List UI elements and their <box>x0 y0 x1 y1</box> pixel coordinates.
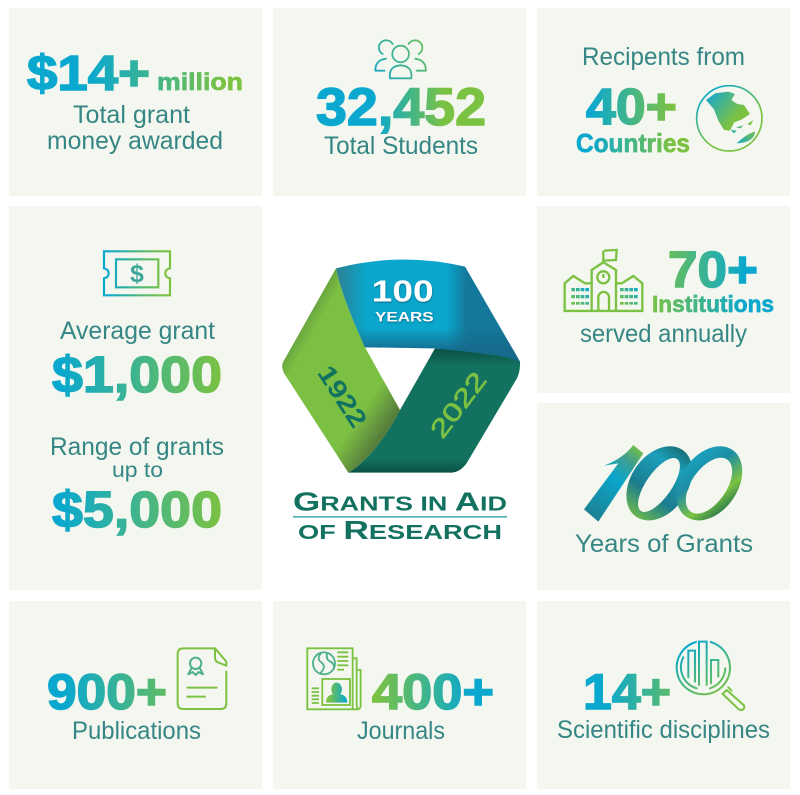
text: 2022: 2022 <box>425 367 493 444</box>
stat: 70+ institutions <box>652 241 774 317</box>
logo mark: ribbon <box>282 260 520 473</box>
icon: school building <box>565 250 642 311</box>
text: 100 years: YEARS <box>375 308 434 324</box>
stat: $14+ million: million <box>157 69 243 96</box>
panel: average grant <box>9 206 262 590</box>
stat: 14+: 14+ <box>583 664 671 720</box>
stat: $14+ million: $14+ <box>27 47 150 101</box>
label: total grant money awarded: Total grant <box>73 101 190 129</box>
text: 1922: 1922 <box>312 361 372 433</box>
stat: 70+ institutions: 70+ <box>668 241 758 298</box>
stat: 40+ countries: 40+ <box>586 78 677 135</box>
icon: certificate document <box>178 648 226 709</box>
wordmark: grants in aid of research: OF RESEARCH <box>298 515 502 545</box>
icon: newspaper <box>307 648 361 709</box>
panel: countries <box>537 8 790 196</box>
text: 100 years <box>372 274 434 324</box>
label: range of grants up to: Range of grants <box>50 433 224 461</box>
panel: years of grants <box>537 403 790 590</box>
panel: total students <box>273 8 526 196</box>
stat: 40+ countries <box>576 78 690 158</box>
wordmark: grants in aid of research <box>293 487 507 545</box>
label: journals: Journals <box>357 717 445 745</box>
label: total students: Total Students <box>324 132 478 160</box>
stat: 400+: 400+ <box>372 664 494 720</box>
icon: people <box>375 40 426 78</box>
stat: 70+ institutions: Institutions <box>652 291 774 317</box>
icon: magnifier with bars <box>677 642 744 710</box>
panel: institutions <box>537 206 790 393</box>
panel: scientific disciplines <box>537 601 790 789</box>
label: years of grants: Years of Grants <box>575 530 753 558</box>
logo: grants in aid of research <box>282 260 520 545</box>
wordmark: grants in aid of research: GRANTS IN AID <box>293 487 507 517</box>
label: recipents from: Recipents from <box>582 43 745 71</box>
icon: money ticket <box>104 251 170 295</box>
stat: $14+ million <box>27 47 243 101</box>
stat: $5,000: $5,000 <box>52 481 222 538</box>
icon: globe <box>697 86 762 151</box>
stat: 40+ countries: Countries <box>576 128 690 158</box>
stat: $1,000: $1,000 <box>52 346 222 403</box>
label: served annually: served annually <box>580 320 747 348</box>
stat: 900+: 900+ <box>47 664 167 720</box>
label: average grant: Average grant <box>60 317 215 345</box>
label: total grant money awarded <box>47 101 223 155</box>
icon: money ticket: $ <box>130 261 144 288</box>
label: range of grants up to: up to <box>112 459 163 482</box>
panel: total grant money <box>9 8 262 196</box>
panel: journals <box>273 601 526 789</box>
panel: publications <box>9 601 262 789</box>
stat: 32,452: 32,452 <box>316 78 486 137</box>
label: publications: Publications <box>72 717 201 745</box>
text: 100 years: 100 <box>372 274 434 308</box>
label: range of grants up to <box>50 433 224 482</box>
label: scientific disciplines: Scientific disciplines <box>557 716 770 744</box>
icon: ribbon 100 <box>584 445 742 522</box>
label: total grant money awarded: money awarded <box>47 127 223 155</box>
